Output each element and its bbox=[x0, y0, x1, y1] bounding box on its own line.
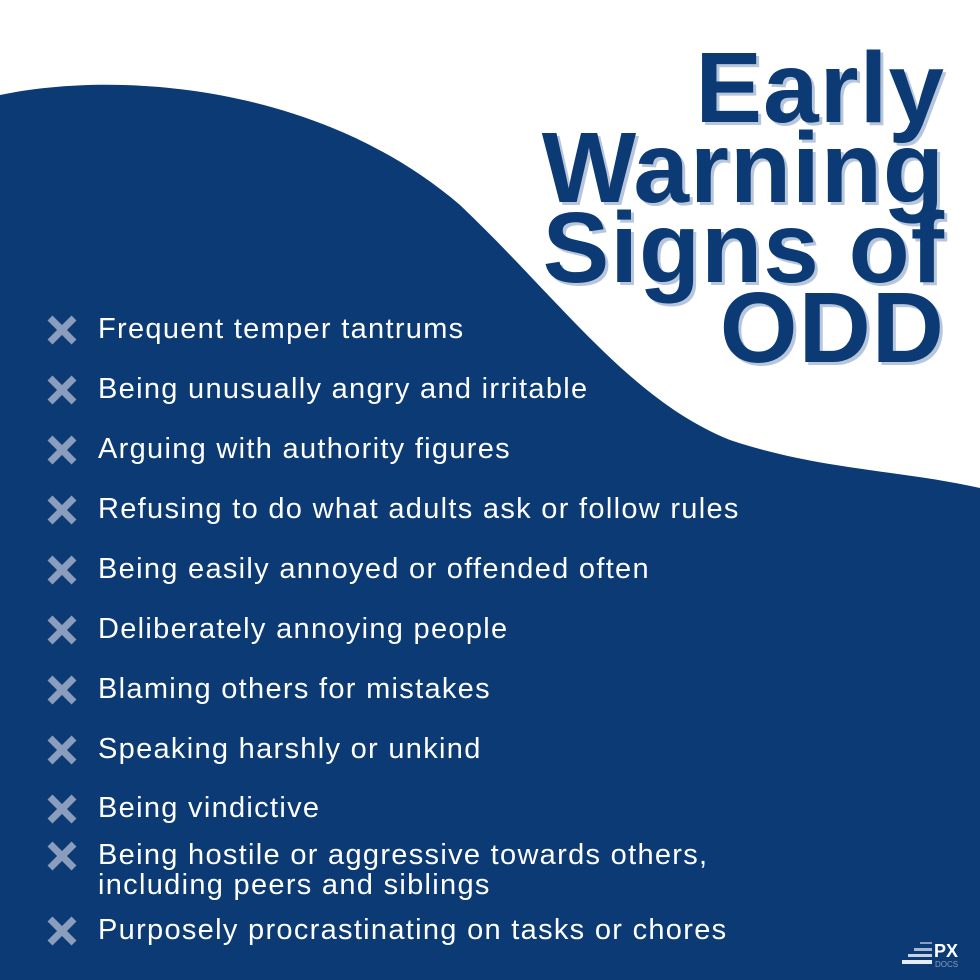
text: Being unusually angry and irritable bbox=[98, 373, 588, 405]
item 9 bbox=[48, 792, 320, 824]
title: Warning bbox=[542, 112, 945, 224]
text: Arguing with authority figures bbox=[98, 433, 511, 465]
title: ODD bbox=[720, 272, 945, 384]
title: Early bbox=[695, 32, 945, 144]
title: Signs of bbox=[543, 192, 945, 304]
text: Purposely procrastinating on tasks or chores bbox=[98, 914, 727, 946]
text: Speaking harshly or unkind bbox=[98, 733, 482, 765]
item 6 bbox=[48, 613, 508, 645]
item 11 bbox=[48, 914, 727, 946]
text: Blaming others for mistakes bbox=[98, 673, 491, 705]
item 1 bbox=[48, 313, 464, 345]
text: Being easily annoyed or offended often bbox=[98, 553, 650, 585]
item 10: Being hostile or aggressive towards others, bbox=[98, 839, 708, 871]
item 10: including peers and siblings bbox=[98, 869, 491, 901]
text: Frequent temper tantrums bbox=[98, 313, 464, 345]
logo: PX bbox=[934, 941, 958, 961]
text: Refusing to do what adults ask or follow rules bbox=[98, 493, 740, 525]
item 5 bbox=[48, 553, 650, 585]
text: Being vindictive bbox=[98, 792, 320, 824]
item 2 bbox=[48, 373, 588, 405]
item 10 bbox=[48, 839, 708, 901]
item 4 bbox=[48, 493, 740, 525]
item 7 bbox=[48, 673, 491, 705]
item 3 bbox=[48, 433, 511, 465]
item 8 bbox=[48, 733, 482, 765]
logo: DOCS bbox=[935, 960, 958, 969]
text: Deliberately annoying people bbox=[98, 613, 508, 645]
logo bbox=[902, 941, 958, 969]
title bbox=[542, 32, 948, 384]
